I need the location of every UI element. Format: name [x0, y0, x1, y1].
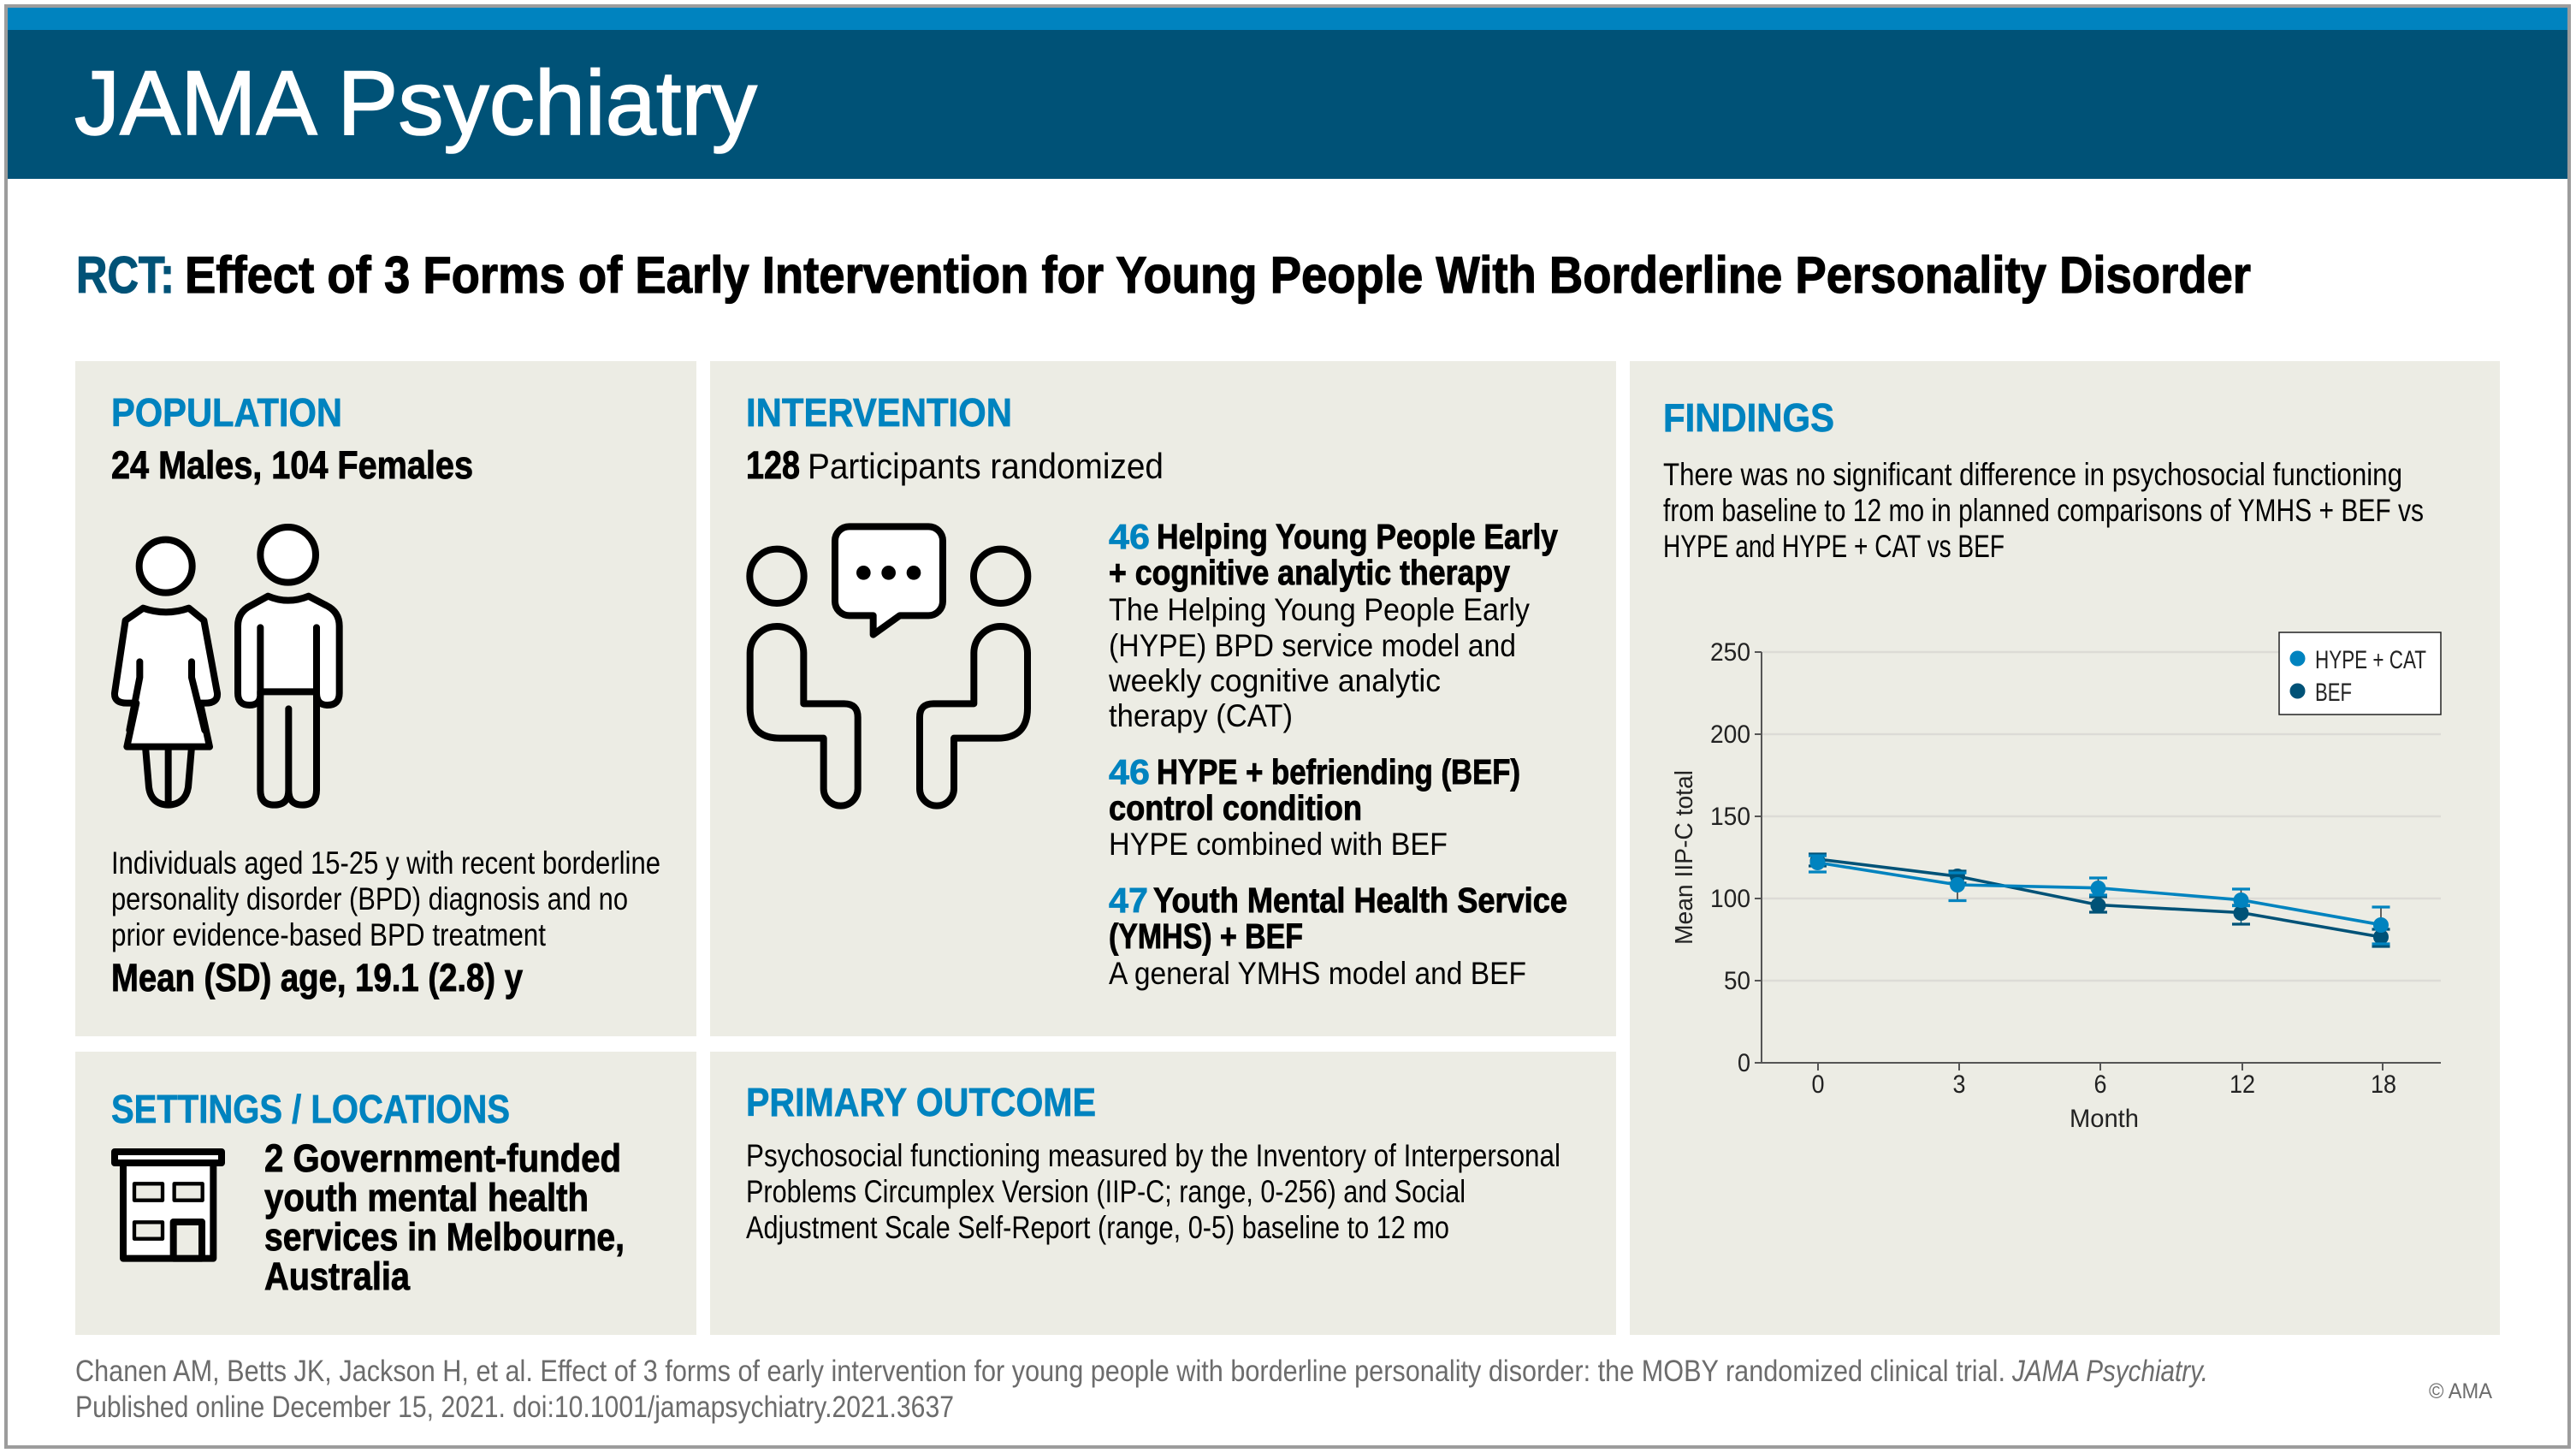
arm 2: HYPE + BEF: control condition	[1109, 788, 1362, 827]
x axis labels	[1812, 1070, 2396, 1099]
intervention heading: INTERVENTION	[746, 390, 1012, 435]
findings description: from baseline to 12 mo in planned comparisons of YMHS + BEF vs	[1663, 493, 2424, 528]
arm 2: HYPE + BEF	[1109, 752, 1520, 862]
y axis labels	[1710, 638, 1750, 1077]
arm 1: HYPE + CAT: + cognitive analytic therapy	[1109, 553, 1510, 592]
arm 2: HYPE + BEF: 46	[1109, 752, 1150, 792]
chart legend: BEF	[2315, 679, 2352, 707]
findings description	[1663, 457, 2424, 564]
x axis labels: 6	[2094, 1070, 2106, 1099]
arm 2: HYPE + BEF: HYPE combined with BEF	[1109, 827, 1448, 862]
panel: population	[75, 361, 696, 1036]
arm 3: YMHS + BEF: 47	[1109, 881, 1148, 920]
x axis title: Month	[2070, 1105, 2139, 1133]
y axis labels: 250	[1710, 638, 1750, 667]
mean age: Mean (SD) age, 19.1 (2.8) y	[111, 956, 523, 999]
x axis labels: 12	[2230, 1070, 2255, 1099]
arm 1: HYPE + CAT	[1108, 517, 1558, 733]
panel: intervention	[710, 361, 1616, 1036]
main title: Effect of 3 Forms of Early Intervention for Young People With Borderline Personality Disorder	[185, 246, 2251, 304]
chart legend	[2279, 632, 2441, 715]
primary outcome heading: PRIMARY OUTCOME	[746, 1080, 1096, 1124]
primary outcome description: Psychosocial functioning measured by the Inventory of Interpersonal	[746, 1138, 1560, 1173]
x axis labels: 0	[1812, 1070, 1824, 1099]
x axis labels: 3	[1952, 1070, 1966, 1099]
citation: JAMA Psychiatry.	[2011, 1355, 2208, 1388]
y axis labels: 0	[1738, 1049, 1750, 1077]
arm 1: HYPE + CAT: therapy (CAT)	[1109, 698, 1293, 733]
citation: Chanen AM, Betts JK, Jackson H, et al. Effect of 3 forms of early intervention for young people with borderline personality disorder: the MOBY randomized clinical trial.	[75, 1355, 2005, 1388]
arm 3: YMHS + BEF: Youth Mental Health Service	[1153, 881, 1567, 920]
settings heading: SETTINGS / LOCATIONS	[111, 1087, 510, 1131]
primary outcome description	[746, 1138, 1560, 1245]
arm 1: HYPE + CAT: Helping Young People Early	[1157, 517, 1558, 556]
population description: prior evidence-based BPD treatment	[111, 917, 547, 952]
journal banner	[8, 8, 2567, 179]
population description	[111, 845, 660, 952]
arm 3: YMHS + BEF: A general YMHS model and BEF	[1109, 956, 1526, 991]
y axis labels: 150	[1710, 803, 1750, 831]
series: BEF	[1809, 853, 2390, 946]
y axis labels: 200	[1710, 721, 1750, 749]
settings description	[264, 1136, 625, 1298]
arm 1: HYPE + CAT: weekly cognitive analytic	[1108, 663, 1441, 698]
main title: RCT:	[76, 246, 175, 304]
primary outcome description: Problems Circumplex Version (IIP-C; range, 0-256) and Social	[746, 1174, 1466, 1209]
settings description: services in Melbourne,	[264, 1215, 625, 1259]
panel: settings and locations	[75, 1052, 696, 1335]
chart legend: HYPE + CAT	[2315, 646, 2426, 674]
icon: building	[115, 1152, 222, 1259]
randomized participants: 128	[746, 443, 800, 487]
arm 1: HYPE + CAT: 46	[1109, 517, 1150, 556]
panel: primary outcome	[710, 1052, 1616, 1335]
population description: personality disorder (BPD) diagnosis and no	[111, 881, 628, 916]
arm 3: YMHS + BEF	[1109, 881, 1567, 991]
arm 1: HYPE + CAT: (HYPE) BPD service model and	[1109, 628, 1516, 663]
population description: Individuals aged 15-25 y with recent borderline	[111, 845, 660, 881]
findings description: HYPE and HYPE + CAT vs BEF	[1663, 529, 2005, 564]
x axis labels: 18	[2371, 1070, 2396, 1099]
citation	[75, 1355, 2208, 1424]
findings heading: FINDINGS	[1663, 395, 1834, 440]
y axis title: Mean IIP-C total	[1671, 770, 1698, 945]
findings description: There was no significant difference in psychosocial functioning	[1663, 457, 2402, 492]
panel: findings	[1630, 361, 2500, 1335]
settings description: youth mental health	[264, 1176, 589, 1219]
citation: Published online December 15, 2021. doi:10.1001/jamapsychiatry.2021.3637	[75, 1391, 954, 1424]
randomized participants: Participants randomized	[808, 446, 1164, 486]
settings description: Australia	[264, 1254, 411, 1298]
icon: woman and man	[115, 527, 340, 805]
primary outcome description: Adjustment Scale Self-Report (range, 0-5) baseline to 12 mo	[746, 1210, 1449, 1245]
y axis labels: 100	[1710, 885, 1750, 913]
copyright: © AMA	[2429, 1379, 2492, 1403]
arm 3: YMHS + BEF: (YMHS) + BEF	[1109, 916, 1303, 956]
arm 2: HYPE + BEF: HYPE + befriending (BEF)	[1157, 752, 1520, 792]
line chart: mean IIP-C total by month	[1671, 632, 2441, 1133]
participant counts: 24 Males, 104 Females	[111, 443, 473, 487]
journal name: JAMA Psychiatry	[74, 51, 757, 154]
arm 1: HYPE + CAT: The Helping Young People Early	[1109, 592, 1530, 627]
settings description: 2 Government-funded	[264, 1136, 621, 1180]
series: HYPE + CAT	[1809, 855, 2390, 944]
y axis labels: 50	[1724, 967, 1750, 995]
icon: two people talking	[749, 526, 1027, 806]
population heading: POPULATION	[111, 390, 342, 435]
